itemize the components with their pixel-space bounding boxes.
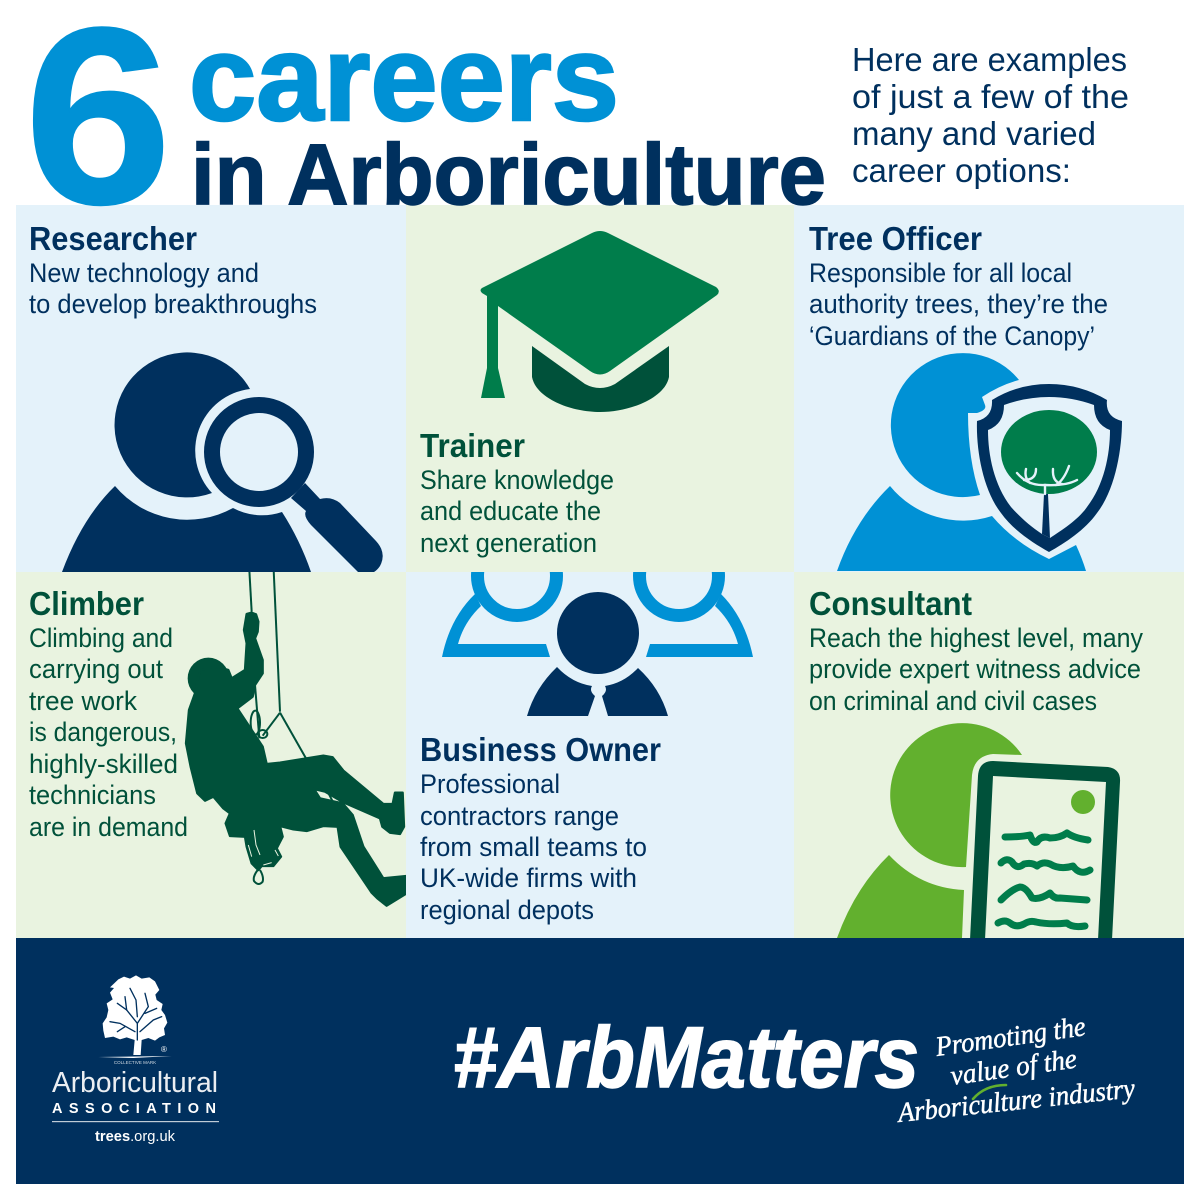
text: consultant description: provide expert witness advice [809, 654, 1141, 684]
text: researcher description: New technology and [29, 258, 259, 288]
heading: business owner: Business Owner [420, 731, 661, 768]
intro text: career options: [852, 153, 1071, 190]
text: climber description: is dangerous, [29, 717, 177, 747]
text: trainer description: next generation [420, 528, 597, 558]
text: business owner description: UK-wide firms with [420, 863, 637, 893]
panel: climber [16, 570, 407, 938]
heading: consultant: Consultant [809, 585, 972, 622]
registered mark: ® [161, 1045, 167, 1054]
icon: person with tree shield [837, 353, 1122, 571]
text: consultant description: on criminal and civil cases [809, 686, 1097, 716]
logo wordmark: Arboricultural [52, 1067, 218, 1099]
text: climber description: Climbing and [29, 623, 173, 653]
heading: tree officer: Tree Officer [809, 220, 982, 257]
strapline: Promoting the [933, 1011, 1088, 1063]
text: climber description: carrying out [29, 654, 163, 684]
panel: business owner [406, 536, 794, 938]
text: researcher description: to develop breakthroughs [29, 289, 317, 319]
text: tree officer description: authority trees, they’re the [809, 289, 1108, 319]
text: trainer description [420, 465, 614, 558]
text: climber description: tree work [29, 686, 137, 716]
icon: person with tablet report [837, 723, 1120, 940]
title line: careers: careers [189, 10, 619, 146]
text: tree officer description: ‘Guardians of the Canopy’ [809, 321, 1095, 351]
hashtag: #ArbMatters [453, 1010, 919, 1106]
text: business owner description [420, 769, 647, 925]
panel: tree officer [794, 205, 1184, 572]
panel: researcher [16, 205, 406, 574]
intro text: many and varied [852, 116, 1096, 153]
strapline [895, 1011, 1137, 1129]
heading: researcher: Researcher [29, 220, 197, 257]
icon: person with magnifying glass [62, 352, 383, 574]
heading: climber: Climber [29, 585, 144, 622]
logo subline: ASSOCIATION [52, 1101, 216, 1117]
text: climber description: highly-skilled [29, 749, 178, 779]
footer band [16, 938, 1184, 1184]
text: climber description: technicians [29, 780, 156, 810]
text: trainer description: Share knowledge [420, 465, 614, 495]
logo url: trees.org.uk [95, 1128, 175, 1145]
text: climber description: are in demand [29, 812, 188, 842]
icon: climber silhouette on ropes [186, 570, 407, 906]
text: business owner description: from small teams to [420, 832, 647, 862]
logo: Arboricultural Association [52, 975, 219, 1145]
text: business owner description: Professional [420, 769, 560, 799]
intro text: Here are examples [852, 42, 1127, 79]
intro text: of just a few of the [852, 79, 1129, 116]
text: tree officer description: Responsible for all local [809, 258, 1072, 288]
panel: consultant [794, 572, 1184, 940]
panel: trainer [406, 205, 794, 572]
text: business owner description: regional depots [420, 895, 594, 925]
title line: in Arboriculture: in Arboriculture [191, 127, 826, 223]
intro text [852, 42, 1129, 190]
text: researcher description [29, 258, 317, 319]
text: consultant description: Reach the highest level, many [809, 623, 1143, 653]
text: climber description [29, 623, 188, 842]
green accent stroke [973, 1085, 1006, 1099]
text: tree officer description [809, 258, 1108, 351]
strapline: Arboriculture industry [895, 1073, 1137, 1129]
icon: team of three people [442, 572, 753, 716]
text: trainer description: and educate the [420, 496, 601, 526]
icon: oak tree [98, 975, 172, 1058]
icon: graduation cap [480, 231, 719, 412]
text: consultant description [809, 623, 1143, 716]
text: business owner description: contractors range [420, 801, 619, 831]
collective mark caption: COLLECTIVE MARK [114, 1060, 156, 1065]
heading: trainer: Trainer [420, 427, 525, 464]
title [24, 0, 826, 257]
strapline: value of the [949, 1044, 1079, 1092]
